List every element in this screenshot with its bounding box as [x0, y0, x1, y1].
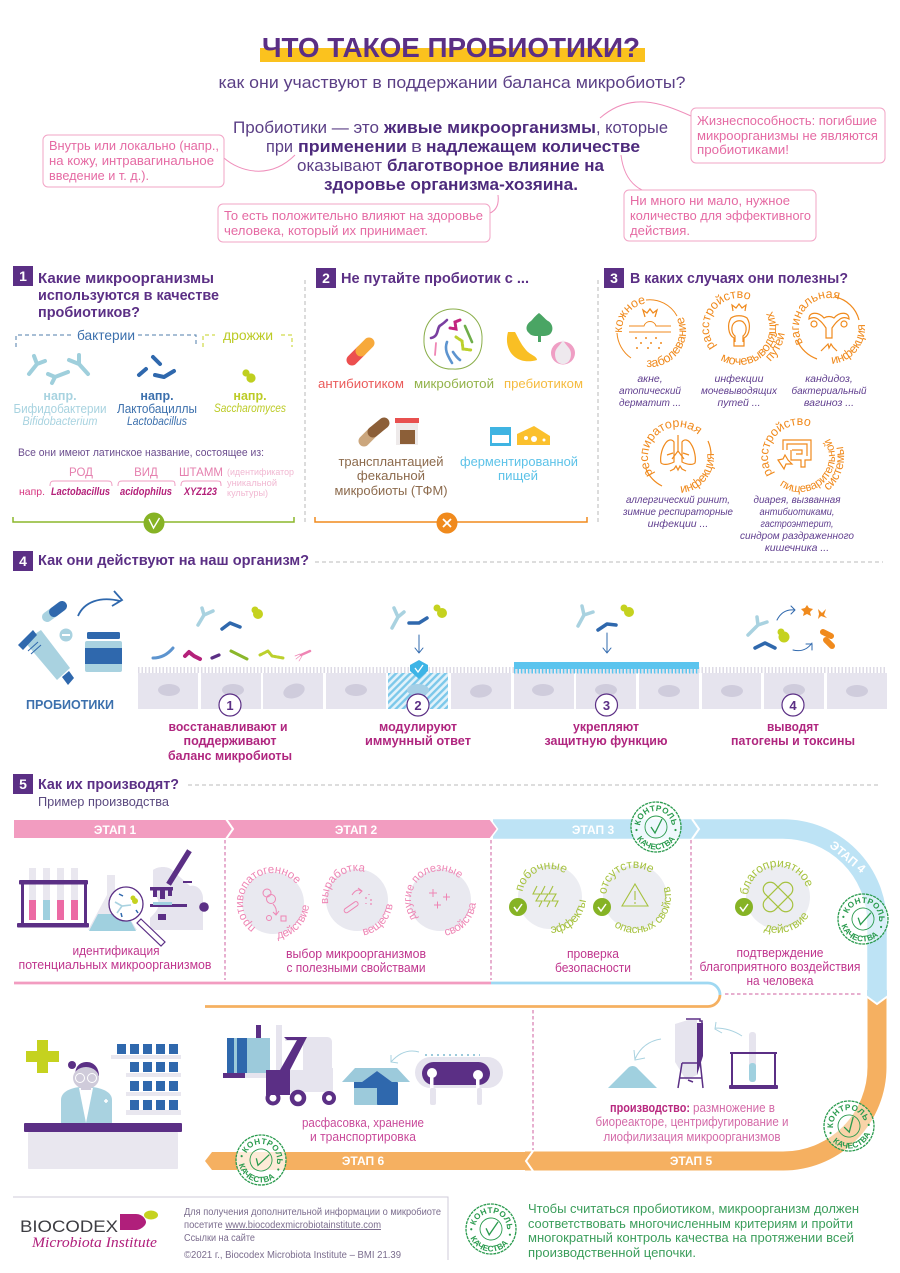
process band: pink stages: ЭТАП 2 [335, 823, 377, 837]
label: identification: идентификация [72, 944, 160, 958]
icon: immune shield [410, 660, 428, 679]
panel 1: which microorganisms [13, 266, 294, 534]
callout: viability [600, 102, 885, 163]
caption 1: баланс микробиоты [168, 749, 292, 763]
heading 4: Как они действуют на наш организм? [38, 553, 309, 569]
label: lactobacillus: Лактобациллы [117, 402, 197, 416]
label list row 2: синдром раздраженного [740, 530, 854, 542]
latin name breakdown [19, 467, 294, 499]
badge: production of substances: выработка [322, 864, 364, 904]
number 3 [596, 694, 618, 716]
label: bifidobacterium: Бифидобактерии [14, 402, 107, 416]
badge: no dangerous properties: отсутствие [600, 862, 654, 894]
label list row 1: атопический [619, 385, 681, 397]
latin name breakdown: (идентификатор [227, 467, 294, 478]
callout: application route: Внутрь или локально (напр., [49, 139, 219, 153]
labels row 1: пребиотиком [504, 376, 583, 391]
badge: side effects [516, 862, 586, 934]
label: bifidobacterium [14, 389, 107, 428]
check [593, 898, 611, 916]
heading 1: используются в качестве [38, 288, 219, 304]
labels row 1: микробиотой [414, 376, 494, 391]
heading 4 [13, 551, 883, 571]
quality control note: производственной цепочки. [528, 1245, 696, 1260]
stamp: quality control stage 4: КОНТРОЛЬ [843, 897, 885, 922]
illustration: lab identification [17, 853, 209, 946]
caption 3: защитную функцию [544, 734, 668, 748]
protective layer [514, 662, 699, 671]
label: production: лиофилизация микроорганизмов [604, 1130, 781, 1144]
label: fecal transplant [334, 454, 448, 498]
heading 1: Какие микроорганизмы [38, 271, 214, 287]
label: lactobacillus: Lactobacillus [127, 414, 187, 428]
illustration: packaging box [342, 1051, 419, 1105]
number 4: 4 [789, 698, 797, 713]
label: selection: с полезными свойствами [286, 961, 426, 975]
stamp: quality control stage 3 [630, 801, 682, 853]
process band: orange stages: ЭТАП 5 [670, 1154, 712, 1168]
label list row 2: антибиотиками, [760, 506, 834, 518]
icon: fermented food [490, 426, 550, 446]
label: lactobacillus: напр. [140, 389, 174, 403]
badge: digestive: пищеварительной [780, 438, 835, 495]
label: confirmation [700, 946, 860, 988]
number 2 [407, 694, 429, 716]
label: identification [18, 944, 212, 972]
badge: other properties [405, 865, 476, 936]
label: safety: проверка [567, 947, 619, 961]
definition text: живые микроорганизмы [383, 118, 596, 137]
icon: prebiotics [507, 313, 575, 364]
label: fecal transplant: фекальной [357, 468, 425, 483]
badge: respiratory: респираторная [641, 420, 702, 477]
definition text: , которые [596, 118, 668, 137]
icon: fecal transplant [364, 418, 419, 445]
latin name breakdown: acidophilus [120, 486, 172, 498]
label list row 2: инфекции ... [648, 518, 708, 530]
label: saccharomyces: напр. [233, 389, 267, 403]
heading 5: 5 [19, 776, 27, 792]
label: selection [286, 947, 426, 975]
illustration: bioreactor [608, 1019, 778, 1089]
label: saccharomyces: Saccharomyces [214, 403, 286, 415]
label list row 2: кишечника ... [765, 542, 829, 554]
bracket with cross [315, 512, 587, 534]
latin name breakdown: напр. [19, 486, 45, 498]
icon: yeast [242, 369, 256, 383]
badge: skin [615, 298, 686, 368]
panel 2: do not confuse [315, 268, 587, 534]
label: bifidobacterium: напр. [43, 389, 77, 403]
latin name breakdown: культуры) [227, 488, 268, 499]
stamp: quality control stage 4 [837, 893, 889, 945]
label: selection: выбор микроорганизмов [286, 947, 426, 961]
stamp: quality control stage 6: КАЧЕСТВА [239, 1163, 275, 1182]
stamp: quality control stage 3: КОНТРОЛЬ [634, 805, 676, 826]
epithelial cells row [138, 670, 887, 709]
bracket: yeast [203, 327, 292, 347]
heading 3: 3 [610, 270, 618, 286]
definition text: при [266, 137, 293, 156]
callout: amount: действия. [630, 224, 690, 238]
label: saccharomyces [214, 389, 286, 415]
process band: pink stages: ЭТАП 1 [94, 823, 136, 837]
caption 4: патогены и токсины [731, 734, 855, 748]
latin name explanation: Все они имеют латинское название, состоящее из: [18, 447, 264, 459]
heading 5: Как их производят? [38, 777, 179, 793]
badge: digestive: расстройство [761, 418, 810, 476]
footer info text: Для получения дополнительной информации о микробиоте [184, 1206, 441, 1218]
logo: Microbiota Institute [31, 1235, 157, 1251]
label: fecal transplant: микробиоты (ТФМ) [334, 483, 448, 498]
subtitle: как они участвуют в поддержании баланса микробиоты? [218, 73, 686, 92]
label list row 1: кандидоз, [805, 373, 853, 385]
definition text: применении [298, 137, 407, 156]
label: lactobacillus [117, 389, 197, 428]
badge: beneficial action [740, 860, 812, 935]
badge: urinary: мочевыводящих [721, 311, 779, 365]
stamp: quality control stage 6: КОНТРОЛЬ [242, 1138, 283, 1164]
labels row 1 [318, 376, 583, 391]
number 3: 3 [603, 698, 610, 713]
label: production: производство: [610, 1101, 690, 1115]
label list row 2: зимние респираторные [622, 506, 733, 518]
badge: antipathogenic action: противопатогенное [236, 866, 300, 932]
callout: viability: микроорганизмы не являются [697, 129, 878, 143]
stamp: quality control stage 6 [235, 1134, 287, 1186]
logo: BIOCODEX [20, 1217, 118, 1236]
illustration: pharmacist [24, 1040, 182, 1169]
badge: other properties: свойства [445, 903, 476, 936]
definition text [233, 118, 668, 194]
stamp: quality control stage 4: КАЧЕСТВА [842, 924, 878, 942]
process band: blue stages: ЭТАП 3 [572, 823, 614, 837]
icon: antibiotic pill [352, 343, 369, 360]
footer info text [184, 1206, 441, 1261]
badge: production of substances [322, 864, 392, 936]
process band: orange stages: ЭТАП 6 [342, 1154, 384, 1168]
badge: digestive [761, 418, 844, 495]
bracket: bacteria: бактерии [77, 327, 135, 343]
icon: probiotic products [18, 591, 122, 685]
label list row 2 [622, 494, 854, 554]
callout: application route [43, 135, 295, 187]
label list row 2: аллергический ринит, [626, 494, 730, 506]
label: packaging: расфасовка, хранение [302, 1116, 424, 1130]
latin name breakdown: Lactobacillus [51, 486, 110, 498]
badge: urinary [702, 291, 785, 365]
caption 3: укрепляют [573, 720, 639, 734]
quality control note [528, 1201, 859, 1260]
label: fermented food: ферментированной [460, 454, 578, 469]
caption 1: восстанавливают и [168, 720, 288, 734]
microbes: step 2 [392, 604, 447, 653]
callout: application route: на кожу, интравагинальное [49, 154, 214, 168]
definition text: благотворное влияние на [387, 156, 605, 175]
badge: beneficial action: благоприятное [740, 860, 812, 894]
badge: no dangerous properties: опасных свойств [615, 886, 671, 934]
label: identification: потенциальных микроорганизмов [18, 958, 212, 972]
label list row 1: мочевыводящих [701, 385, 778, 397]
badge: vaginal [792, 291, 866, 364]
title: ЧТО ТАКОЕ ПРОБИОТИКИ? [262, 32, 640, 63]
label: production: биореакторе, центрифугирование и [596, 1115, 789, 1129]
check [735, 898, 753, 916]
caption 4: выводят [767, 720, 819, 734]
icon: microbiota [424, 309, 482, 369]
heading 2: Не путайте пробиотик с ... [341, 271, 529, 287]
icon: lactobacilli [139, 357, 174, 377]
label: packaging: и транспортировка [310, 1130, 416, 1144]
badge: antipathogenic action: действие [278, 905, 309, 942]
latin name breakdown: ВИД [134, 467, 158, 479]
badge: skin: заболевание [646, 318, 686, 368]
latin name breakdown: ШТАММ [179, 467, 223, 479]
process band: blue stages: ЭТАП 4 [827, 838, 868, 876]
footer info text: ©2021 г., Biocodex Microbiota Institute – BMI 21.39 [184, 1250, 401, 1261]
badge: no dangerous properties [600, 862, 671, 934]
microbes: step 3 [578, 604, 634, 653]
heading 5 [13, 774, 880, 809]
process band: blue stages [493, 819, 888, 1004]
label list row 1: бактериальный [792, 385, 867, 397]
caption 1 [168, 720, 292, 763]
latin name breakdown: XYZ123 [183, 486, 217, 498]
latin name breakdown: РОД [69, 467, 93, 479]
panel 4: how they act [13, 551, 887, 763]
callout: benefit: То есть положительно влияют на здоровье [224, 209, 483, 223]
badge: other properties: другие полезные [405, 865, 462, 920]
badge: respiratory [641, 420, 715, 493]
label list row 2: гастроэнтерит, [760, 518, 834, 530]
callout: application route: введение и т. д.). [49, 169, 149, 183]
label list row 1: акне, [637, 373, 663, 385]
badge: urinary: расстройство [702, 291, 750, 350]
number 2: 2 [414, 698, 422, 713]
process band: orange stages [205, 996, 877, 1171]
label: confirmation: благоприятного воздействия [700, 960, 860, 974]
label: fermented food [460, 454, 578, 483]
definition text: надлежащем количестве [426, 137, 640, 156]
bracket with check [13, 512, 294, 534]
caption 1: поддерживают [184, 734, 276, 748]
definition text: здоровье организма-хозяина. [324, 175, 578, 194]
callout: amount [621, 155, 816, 241]
heading 3: В каких случаях они полезны? [630, 271, 848, 287]
heading 2: 2 [322, 270, 330, 286]
number 1 [219, 694, 241, 716]
badge: production of substances: веществ [362, 904, 392, 936]
label: confirmation: на человека [746, 974, 814, 988]
heading 1 [13, 266, 219, 321]
label list row 1 [619, 373, 867, 409]
caption 2: иммунный ответ [365, 734, 471, 748]
badge: vaginal: инфекция [832, 325, 866, 364]
label: safety [555, 947, 631, 975]
caption 2 [365, 720, 471, 748]
label: fecal transplant: трансплантацией [338, 454, 444, 469]
badge: skin: кожное [615, 298, 645, 332]
number 4 [782, 694, 804, 716]
microbes: step 1 [153, 606, 310, 661]
callout: viability: Жизнеспособность: погибшие [697, 114, 877, 128]
logo [20, 1210, 158, 1251]
check [509, 898, 527, 916]
footer info text: посетите www.biocodexmicrobiotainstitute.com [184, 1220, 381, 1231]
callout: benefit: человека, который их принимает. [224, 224, 428, 238]
definition text: оказывают [297, 156, 382, 175]
heading 5: Пример производства [38, 795, 169, 809]
latin name breakdown: уникальной [227, 478, 277, 489]
stamp: quality control stage 5: КАЧЕСТВА [833, 1133, 870, 1149]
heading 1: пробиотиков? [38, 305, 140, 321]
stamp: quality control stage 5: КОНТРОЛЬ [827, 1104, 868, 1128]
label: bifidobacterium: Bifidobacterium [22, 414, 98, 428]
caption 2: модулируют [379, 720, 457, 734]
labels row 1: антибиотиком [318, 376, 404, 391]
bracket: bacteria [16, 327, 196, 347]
footer [13, 1196, 859, 1261]
label: fermented food: пищей [498, 468, 538, 483]
illustration: forklift [223, 1025, 334, 1104]
stamp: quality control stage 5 [823, 1100, 875, 1152]
label: production: размножение в [693, 1101, 775, 1115]
stamp: quality control footer: КАЧЕСТВА [470, 1236, 508, 1252]
illustration: conveyor [415, 1055, 503, 1105]
definition text: в [411, 137, 422, 156]
quality control note: соответствовать многочисленным критериям и пройти [528, 1216, 853, 1231]
panel 3: when useful [604, 268, 867, 554]
quality control note: Чтобы считаться пробиотиком, микроорганизм должен [528, 1201, 859, 1216]
label list row 1: дерматит ... [619, 397, 681, 409]
label: confirmation: подтверждение [736, 946, 824, 960]
label: safety: безопасности [555, 961, 631, 975]
badge: vaginal: вагинальная [792, 291, 840, 346]
microbes: step 4 [748, 605, 832, 651]
footer info text: Ссылки на сайте [184, 1233, 255, 1244]
label list row 1: инфекции [714, 373, 764, 385]
return line [14, 983, 720, 1006]
label list row 1: вагиноз ... [804, 397, 854, 409]
badge: side effects: побочные [516, 862, 566, 892]
label list row 2: диарея, вызванная [754, 494, 841, 506]
stamp: quality control footer [465, 1203, 517, 1255]
badge: side effects: эффекты [550, 900, 586, 934]
heading 4: 4 [19, 553, 27, 569]
heading 1: 1 [19, 268, 27, 284]
bracket: yeast: дрожжи [223, 327, 273, 343]
icon: bifidobacteria [29, 355, 88, 383]
callout: benefit [218, 195, 498, 242]
callout: amount: количество для эффективного [630, 209, 811, 223]
callout: viability: пробиотиками! [697, 143, 789, 157]
label: packaging [302, 1116, 424, 1144]
stamp: quality control footer: КОНТРОЛЬ [470, 1207, 512, 1230]
label list row 1: путей ... [717, 397, 761, 409]
caption 4 [731, 720, 855, 748]
quality control note: многократный контроль качества на протяжении всей [528, 1230, 854, 1245]
badge: digestive: системы [825, 447, 844, 490]
badge: respiratory: инфекция [680, 454, 715, 493]
caption 3 [544, 720, 668, 748]
callout: amount: Ни много ни мало, нужное [630, 194, 790, 208]
label: production [596, 1101, 789, 1144]
process band: pink stages [14, 819, 498, 839]
definition text: Пробиотики — это [233, 118, 379, 137]
stamp: quality control stage 3: КАЧЕСТВА [637, 836, 675, 850]
panel 5: how produced [13, 774, 889, 1186]
number 1: 1 [226, 698, 234, 713]
label: probiotics: ПРОБИОТИКИ [26, 697, 114, 712]
badge: beneficial action: действие [763, 913, 808, 935]
badge: urinary: путей [766, 333, 785, 362]
